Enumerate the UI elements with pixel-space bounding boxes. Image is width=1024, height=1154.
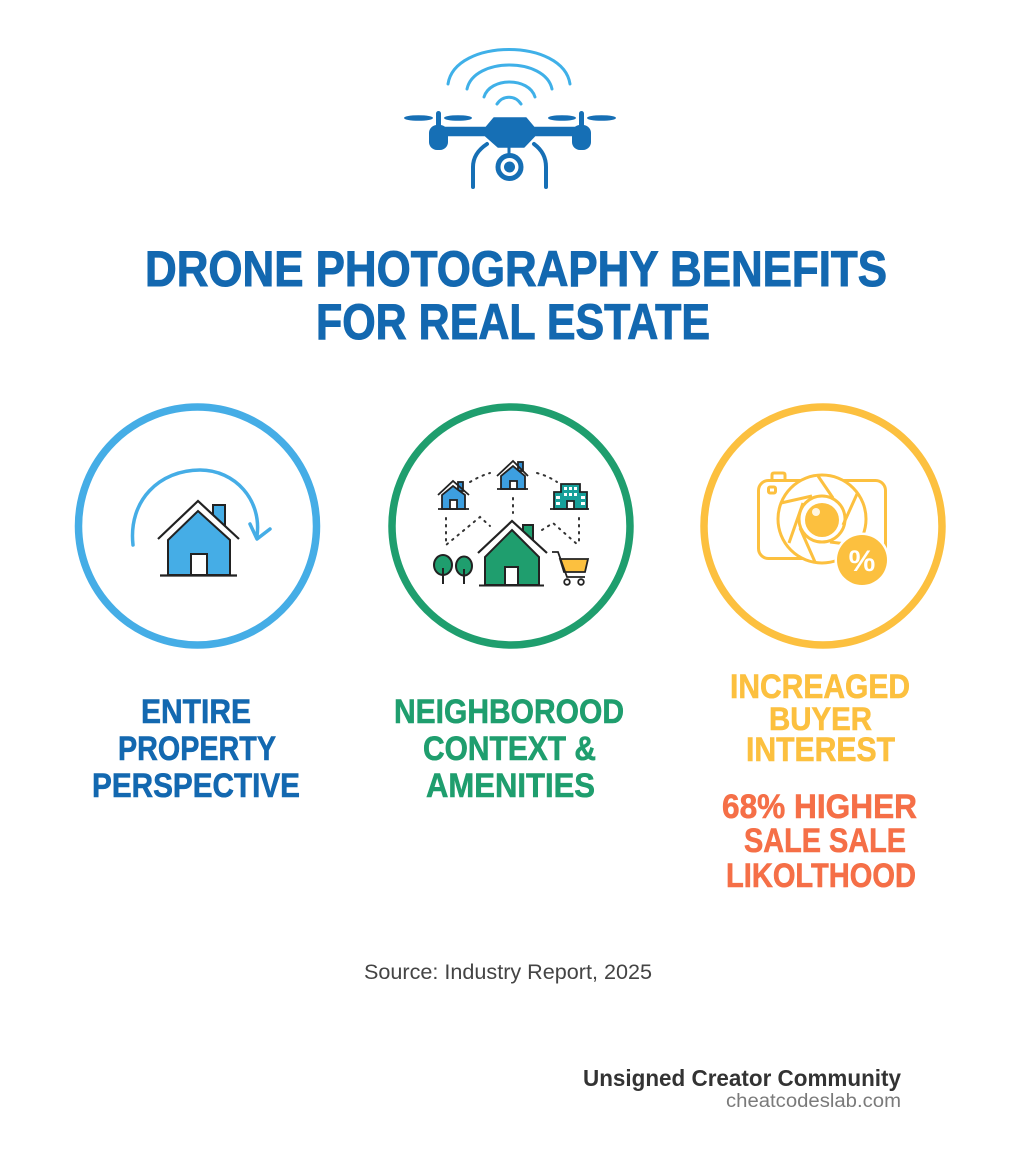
icon: signal waves bbox=[448, 50, 570, 104]
panel: entire property perspective bbox=[78, 407, 316, 805]
heading: neighborhood context and amenities bbox=[394, 693, 624, 805]
callout: 68% higher sale likelihood: LIKOLTHOOD bbox=[726, 857, 916, 895]
icon: trees bbox=[434, 555, 472, 584]
icon: camera with percent badge bbox=[758, 473, 890, 588]
credit block bbox=[583, 1065, 901, 1112]
heading: neighborhood context and amenities: CONTEXT & bbox=[423, 730, 596, 768]
heading: entire property perspective bbox=[92, 693, 300, 805]
heading: neighborhood context and amenities: NEIGHBOROOD bbox=[394, 693, 624, 731]
icon: main green house bbox=[478, 521, 547, 586]
callout: 68% higher sale likelihood bbox=[722, 788, 917, 895]
title: FOR REAL ESTATE bbox=[316, 294, 710, 350]
heading: entire property perspective: PROPERTY bbox=[118, 730, 276, 768]
icon: small top house bbox=[497, 461, 528, 489]
dotted connectors bbox=[446, 473, 579, 545]
icon: neighborhood map bbox=[434, 461, 589, 586]
credit block: Unsigned Creator Community bbox=[583, 1065, 901, 1091]
heading: entire property perspective: ENTIRE bbox=[141, 693, 251, 731]
icon: house with orbit arrow bbox=[132, 470, 270, 576]
heading: increased buyer interest bbox=[730, 668, 910, 769]
heading: increased buyer interest: BUYER bbox=[769, 701, 872, 737]
panel: neighborhood context bbox=[392, 407, 630, 805]
icon: yellow circle ring bbox=[704, 407, 942, 645]
icon: drone with signal waves bbox=[404, 50, 616, 187]
icon: camera with percent badge: % bbox=[849, 545, 875, 578]
heading: increased buyer interest: INCREAGED bbox=[730, 668, 910, 706]
callout: 68% higher sale likelihood: SALE SALE bbox=[744, 822, 906, 860]
credit block: cheatcodeslab.com bbox=[726, 1091, 901, 1112]
panel: increased buyer interest bbox=[704, 407, 942, 895]
callout: 68% higher sale likelihood: 68% HIGHER bbox=[722, 788, 917, 826]
icon: green circle ring bbox=[392, 407, 630, 645]
icon: drone body bbox=[404, 111, 616, 187]
icon: shopping cart bbox=[552, 552, 588, 585]
icon: apartment building bbox=[550, 484, 589, 509]
heading: increased buyer interest: INTEREST bbox=[746, 731, 895, 769]
title: DRONE PHOTOGRAPHY BENEFITS bbox=[145, 241, 887, 297]
source note: Source: Industry Report, 2025 bbox=[364, 961, 652, 984]
heading: entire property perspective: PERSPECTIVE bbox=[92, 767, 300, 805]
heading: neighborhood context and amenities: AMENITIES bbox=[426, 767, 595, 805]
icon: blue circle ring bbox=[78, 407, 316, 645]
icon: small left house bbox=[438, 481, 469, 509]
title bbox=[145, 241, 887, 350]
